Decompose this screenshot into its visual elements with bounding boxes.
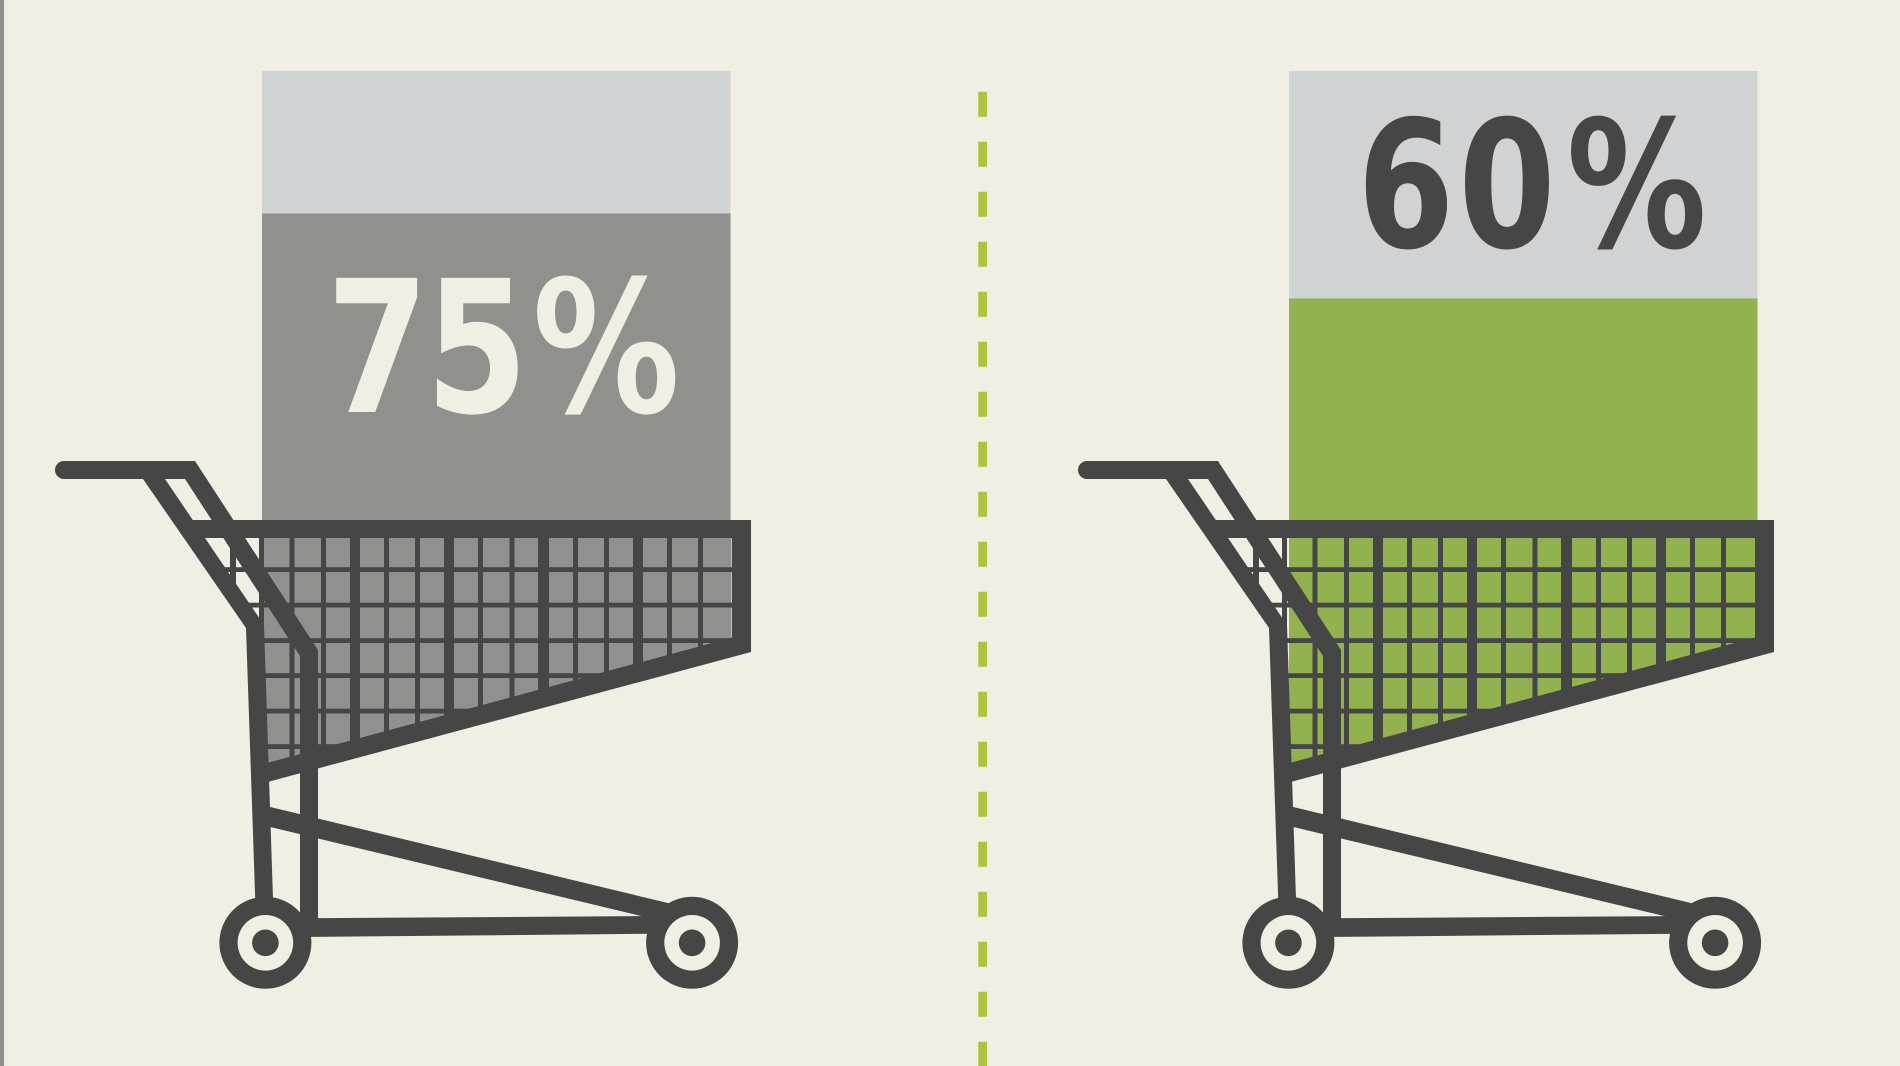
basket grid [224,538,732,766]
rear wheel [1669,897,1761,989]
icon: left shopping cart [55,461,751,989]
panel: 60 percent bar [1289,71,1758,763]
handle [1078,461,1216,479]
front wheel [1242,897,1334,989]
basket grid [1247,538,1755,766]
front rail and pole [1166,479,1296,905]
dashed divider [978,92,987,1066]
lower strut [1285,805,1695,921]
basket frame [190,520,751,784]
bar filled portion [1289,298,1758,763]
bar filled portion [262,214,732,764]
base bar [300,916,660,937]
left edge strip [0,0,4,1066]
basket frame [1213,520,1774,784]
base bar [1323,916,1683,937]
rear rail and pole [180,461,318,925]
bar remainder [1289,71,1758,298]
value: 60%: 60% [1357,83,1707,289]
panel: 75 percent bar [262,71,732,764]
rear rail and pole [1203,461,1341,925]
lower strut [262,805,672,921]
front wheel [219,897,311,989]
value: 75%: 75% [326,242,680,456]
icon: right shopping cart [1078,461,1774,989]
rear wheel [646,897,738,989]
bar remainder [262,71,730,214]
handle [55,461,193,479]
front rail and pole [143,479,273,905]
